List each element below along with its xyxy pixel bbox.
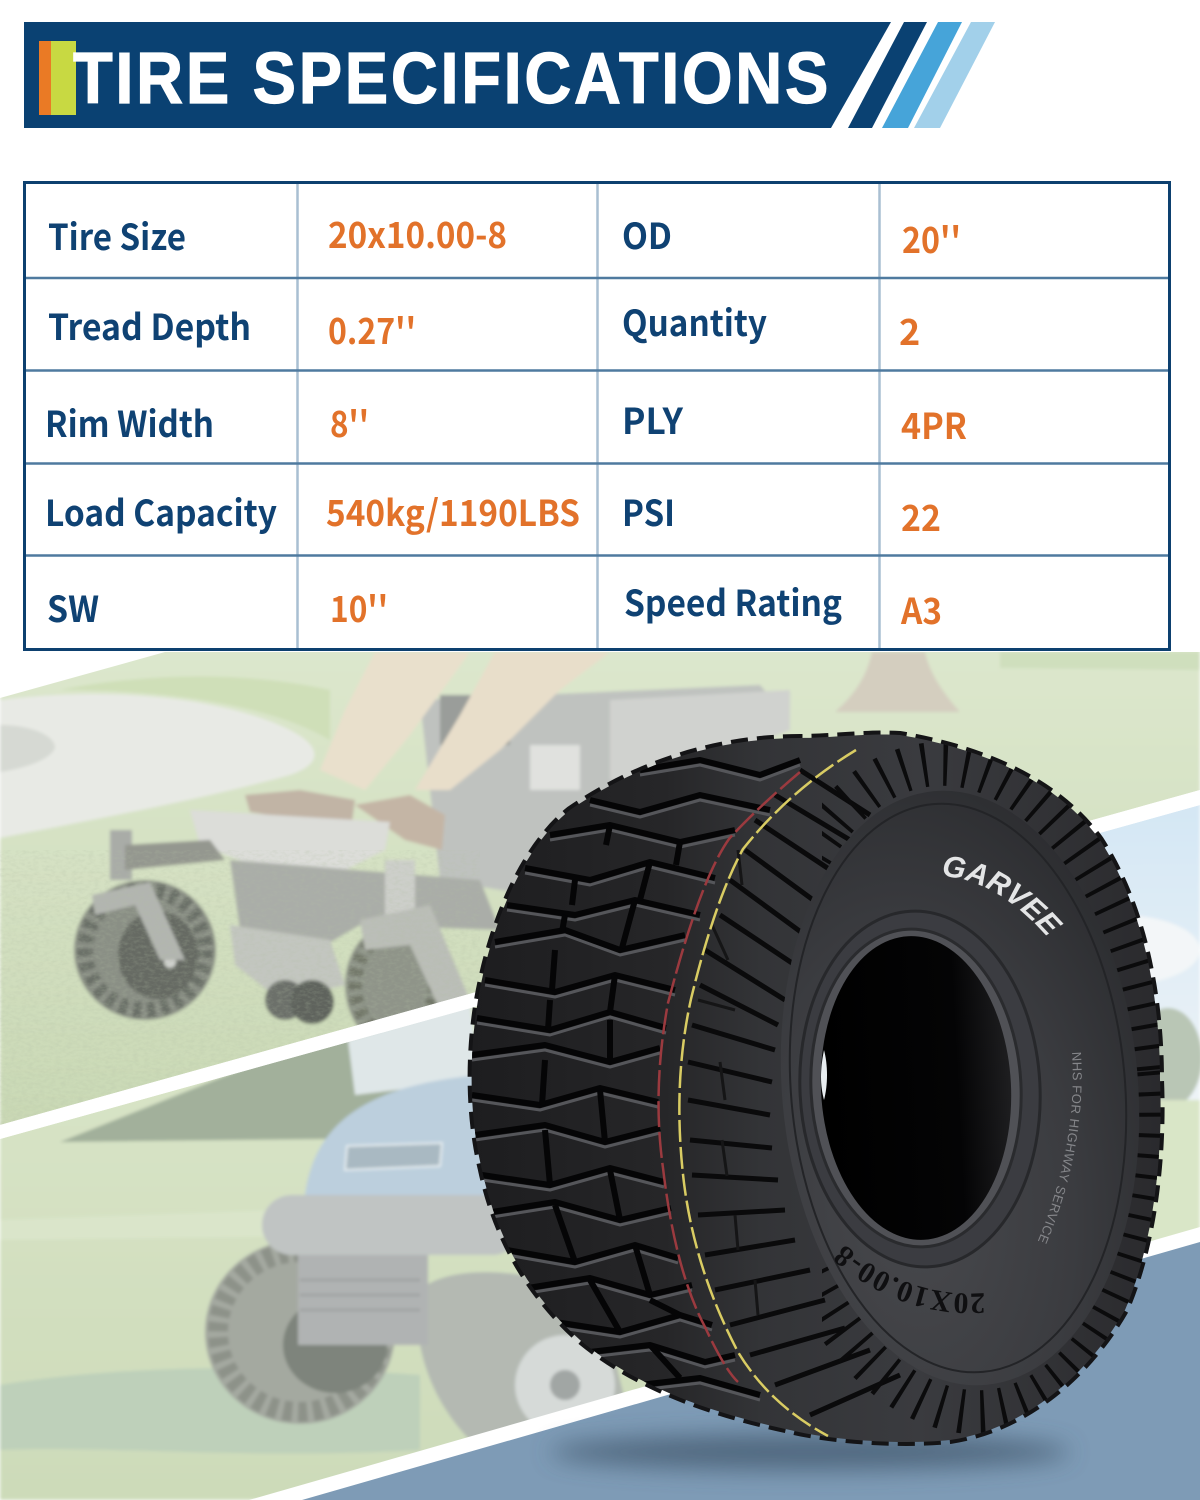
row: SW / speed rating: A3	[900, 583, 942, 635]
row: load capacity / PSI: 540kg/1190LBS	[326, 485, 580, 537]
row: tread depth / quantity: 0.27''	[328, 303, 416, 355]
title banner	[24, 22, 995, 128]
row: tire size / OD: 20x10.00-8	[328, 207, 507, 259]
row: rim width / PLY	[45, 393, 967, 450]
brand text: GARVEE	[944, 856, 1064, 936]
row: tire size / OD: Tire Size	[48, 209, 186, 261]
white diagonal stripe	[0, 790, 1200, 1139]
row: SW / speed rating: 10''	[330, 581, 388, 633]
row: SW / speed rating: SW	[47, 581, 99, 633]
golf cart bumper and grille	[262, 1195, 522, 1345]
row: tread depth / quantity	[48, 295, 920, 356]
tire sidewall	[757, 776, 1163, 1400]
row: tire size / OD: 20''	[902, 212, 961, 264]
sidewall rings	[767, 790, 1149, 1386]
tread pattern	[472, 747, 1185, 1429]
mower foot plate	[190, 810, 391, 870]
mower front left wheel	[74, 880, 216, 1020]
hole rim	[803, 924, 1029, 1252]
row: tread depth / quantity: Quantity	[622, 295, 767, 347]
background sliver through the hole	[821, 1050, 827, 1100]
specification table	[24, 182, 1170, 650]
mower front right wheel	[343, 906, 468, 1026]
background: golf cart photo band	[0, 790, 1200, 1500]
hole outer ring	[791, 905, 1049, 1273]
mower seat and engine	[420, 685, 790, 900]
title: TIRE SPECIFICATIONS	[73, 39, 831, 119]
row: tread depth / quantity: 2	[899, 304, 920, 356]
row: SW / speed rating: Speed Rating	[624, 575, 842, 627]
tire center hole	[813, 931, 1019, 1245]
sidewall notice: NHS FOR HIGHWAY SERVICE	[1038, 1052, 1082, 1244]
golf cart windshield	[348, 1005, 480, 1095]
golf cart hood	[305, 1075, 500, 1200]
tire body	[472, 735, 1161, 1442]
row: load capacity / PSI	[45, 485, 941, 542]
grass texture	[0, 850, 435, 1124]
tire contact shadow	[550, 1434, 1070, 1470]
golf cart front wheels	[204, 1244, 624, 1438]
operator legs	[245, 652, 610, 850]
banner stripe blue	[882, 22, 962, 128]
accent lime	[51, 41, 76, 115]
row: load capacity / PSI: 22	[901, 490, 941, 542]
tire tread teeth	[472, 735, 1161, 1442]
banner stripe navy	[848, 22, 927, 128]
red center line	[659, 772, 800, 1382]
banner background	[24, 22, 891, 128]
row: rim width / PLY: PLY	[622, 393, 684, 445]
row: tire size / OD	[48, 207, 961, 264]
mower frame	[110, 830, 500, 1024]
banner stripe light blue	[914, 22, 995, 128]
yellow center line	[679, 750, 856, 1436]
accent orange	[39, 41, 51, 115]
row: load capacity / PSI: PSI	[622, 485, 675, 537]
tire shoulder lugs	[822, 743, 1160, 1434]
row: SW / speed rating	[47, 575, 942, 635]
sidewall size marking: 20X10.00-8	[835, 1246, 984, 1314]
row: load capacity / PSI: Load Capacity	[45, 485, 277, 537]
tire	[468, 730, 1165, 1446]
row: rim width / PLY: Rim Width	[45, 396, 214, 448]
blue floor	[302, 1242, 1200, 1500]
row: tread depth / quantity: Tread Depth	[48, 299, 251, 351]
row: rim width / PLY: 4PR	[901, 398, 967, 450]
row: tire size / OD: OD	[622, 208, 672, 260]
row: rim width / PLY: 8''	[330, 396, 369, 448]
background: mower photo band	[0, 645, 1200, 1135]
